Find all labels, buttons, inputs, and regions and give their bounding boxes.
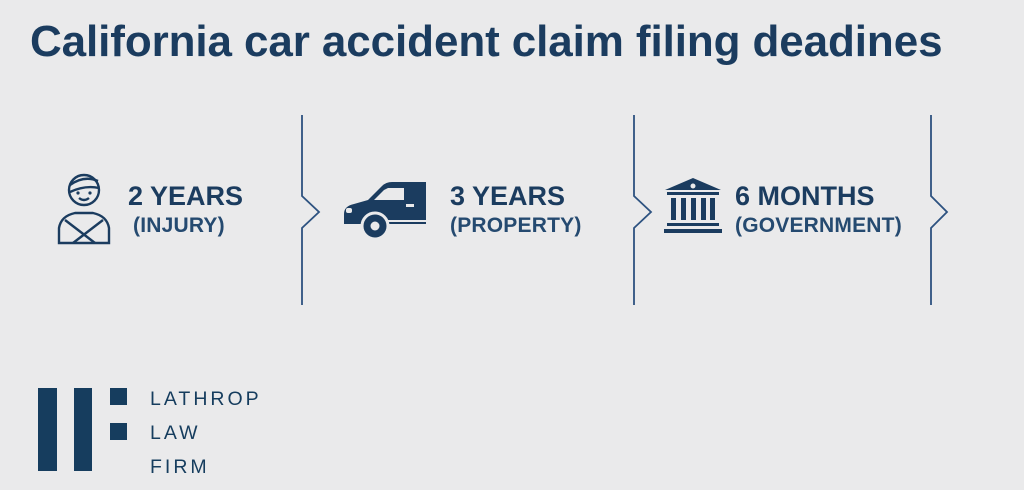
logo text: FIRM (150, 456, 210, 478)
text: 2 years: 2 YEARS (128, 181, 243, 211)
text: property: (PROPERTY) (450, 214, 582, 237)
panel: injury (58, 174, 243, 244)
panel: government (664, 178, 902, 237)
logo text: LATHROP (150, 388, 262, 410)
text: government: (GOVERNMENT) (735, 214, 902, 237)
text: 6 months: 6 MONTHS (735, 181, 875, 211)
icon: car (344, 182, 426, 238)
text: 3 years: 3 YEARS (450, 181, 565, 211)
panel: property (344, 181, 582, 238)
logo text: LAW (150, 422, 201, 444)
logo: Lathrop Law Firm (38, 388, 262, 478)
logo text (150, 388, 262, 478)
icon: bandaged person (58, 174, 110, 244)
title: California car accident claim filing deadines (30, 17, 942, 66)
text: injury: (INJURY) (133, 214, 225, 237)
icon: government building (664, 178, 722, 233)
